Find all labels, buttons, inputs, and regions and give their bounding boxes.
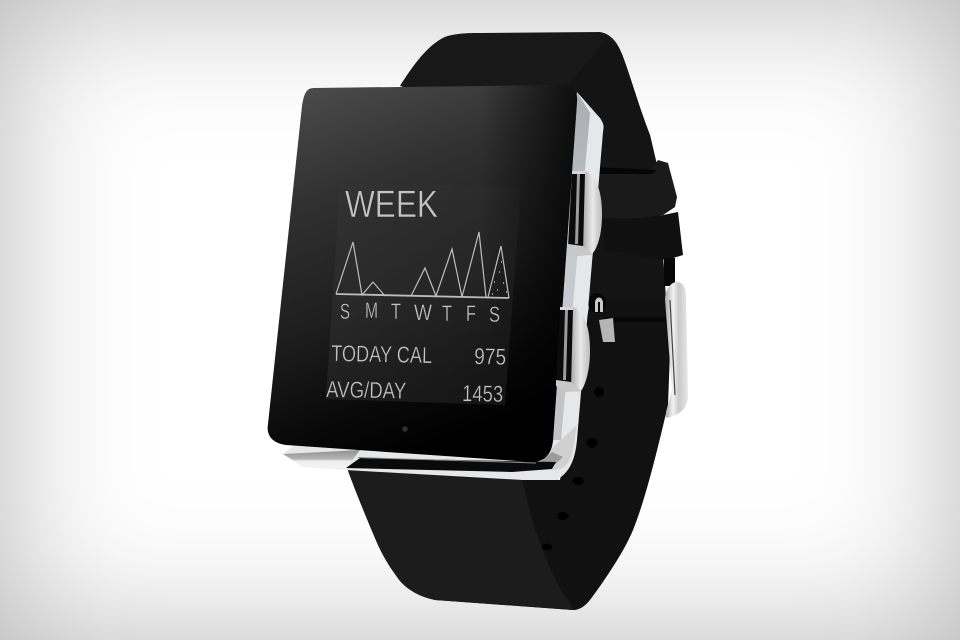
day labels: F [466, 301, 476, 326]
strap crease below buttons [604, 317, 668, 322]
day labels: S [489, 302, 500, 327]
buckle pin [588, 293, 615, 342]
average per day row: 1453 [462, 380, 503, 407]
day labels: M [365, 298, 378, 323]
keeper shadow line [598, 167, 657, 174]
today calories row: 975 [474, 343, 506, 370]
watch face [268, 85, 577, 462]
black gap under face [346, 458, 556, 472]
day labels: W [414, 300, 432, 325]
upper strap [400, 32, 668, 360]
day labels: T [391, 299, 401, 324]
average per day row: AVG/DAY [326, 376, 406, 404]
screen panel [326, 184, 521, 405]
lower strap front panel [347, 468, 573, 610]
buckle [665, 282, 688, 418]
thin metal lip under face [358, 458, 536, 463]
average per day row [326, 376, 503, 407]
day labels [340, 298, 500, 327]
day labels: S [340, 299, 350, 324]
weekly calorie line chart [336, 232, 509, 298]
front sensor dot [402, 426, 408, 432]
day labels: T [442, 301, 452, 326]
upper strap right fold [566, 41, 668, 360]
lower strap [347, 300, 672, 610]
top side button [568, 171, 602, 256]
watch case: metal side and bottom [283, 92, 604, 480]
screen heading: WEEK [345, 184, 438, 226]
strap loop: upper keeper [598, 160, 677, 219]
bottom side button [556, 307, 590, 393]
today calories row: TODAY CAL [331, 340, 433, 368]
strap tail end [664, 258, 675, 286]
strap loop: lower keeper [600, 212, 683, 260]
watch face right edge shading [268, 85, 577, 462]
strap holes [542, 387, 604, 550]
